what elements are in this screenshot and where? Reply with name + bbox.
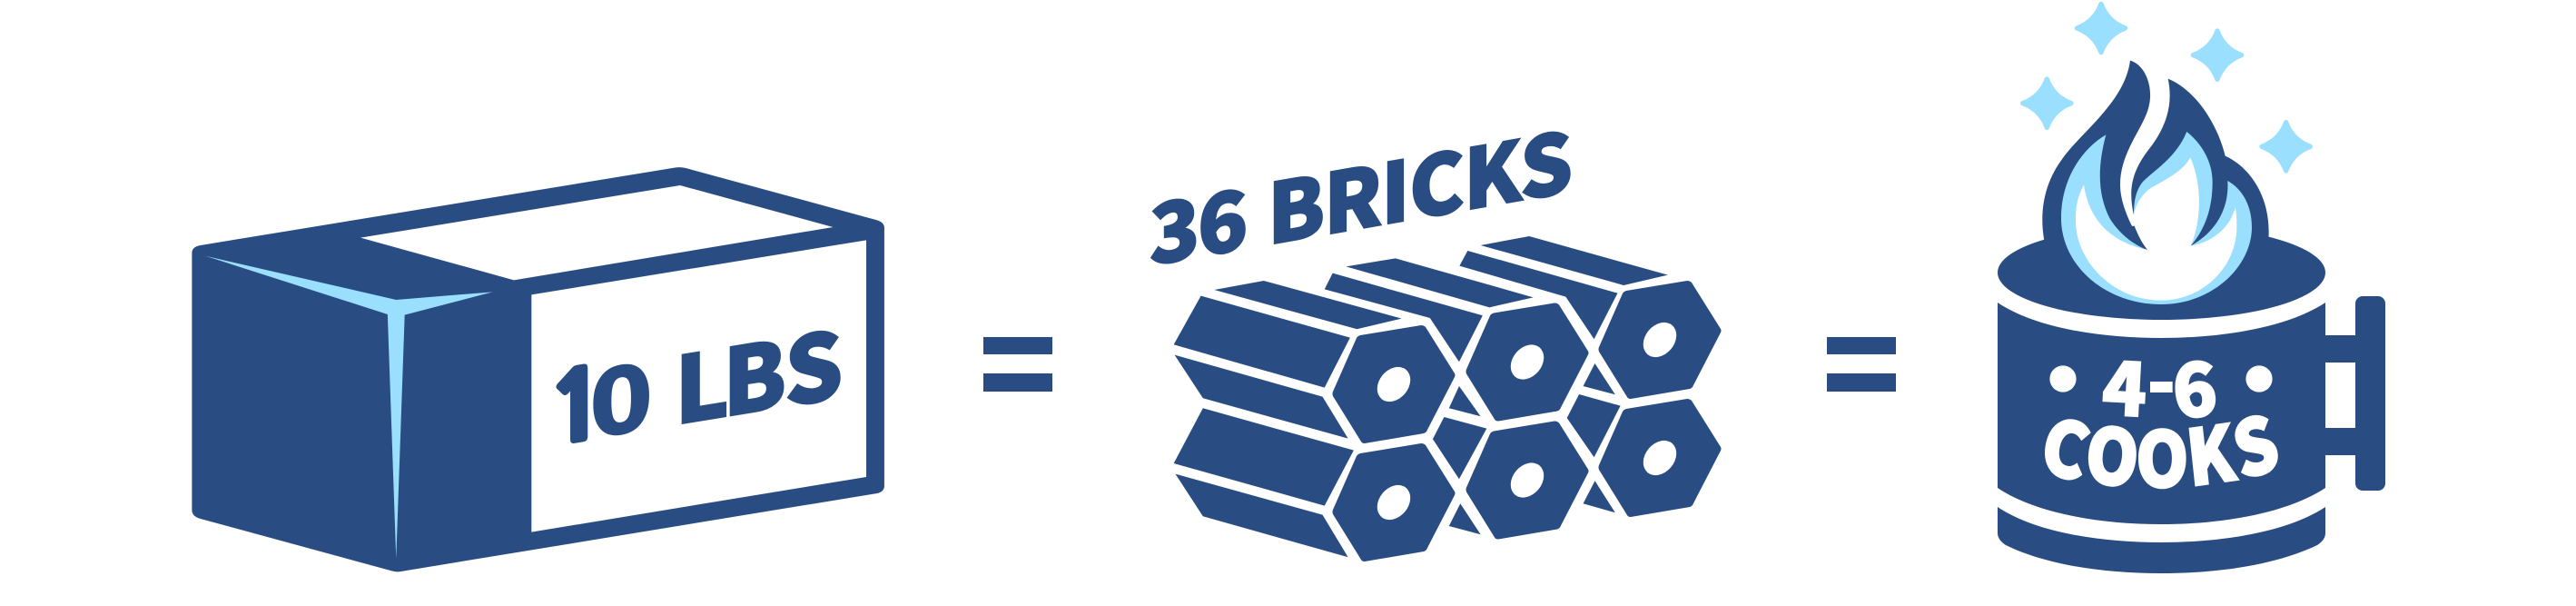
label: 36 BRICKS: 36 BRICKS — [1150, 96, 1573, 290]
box artwork — [192, 167, 884, 571]
label: 10 LBS: LBS — [636, 292, 844, 458]
equals sign 1 — [983, 337, 1052, 392]
brick holes — [1370, 316, 1683, 526]
icon: bricks — [1150, 96, 1722, 561]
label: 10 LBS: 1 — [548, 355, 606, 460]
label dots — [2049, 365, 2273, 392]
pot handle — [2324, 296, 2385, 491]
brick end faces — [1333, 281, 1722, 561]
sparkles — [2023, 4, 2310, 171]
pot lid — [1998, 225, 2325, 320]
brick stack artwork — [1174, 236, 1668, 557]
label: COOKS: COOKS — [2033, 382, 2288, 510]
icon: cooking pot with flame — [1998, 4, 2385, 573]
equals sign 2 — [1827, 337, 1896, 392]
pot body — [1998, 303, 2325, 524]
pot base — [1998, 507, 2325, 573]
icon: box — [192, 167, 884, 571]
label: 10 LBS: 0 — [589, 343, 653, 460]
flame — [2042, 61, 2269, 304]
label: 4-6: 4-6 — [2100, 324, 2220, 440]
